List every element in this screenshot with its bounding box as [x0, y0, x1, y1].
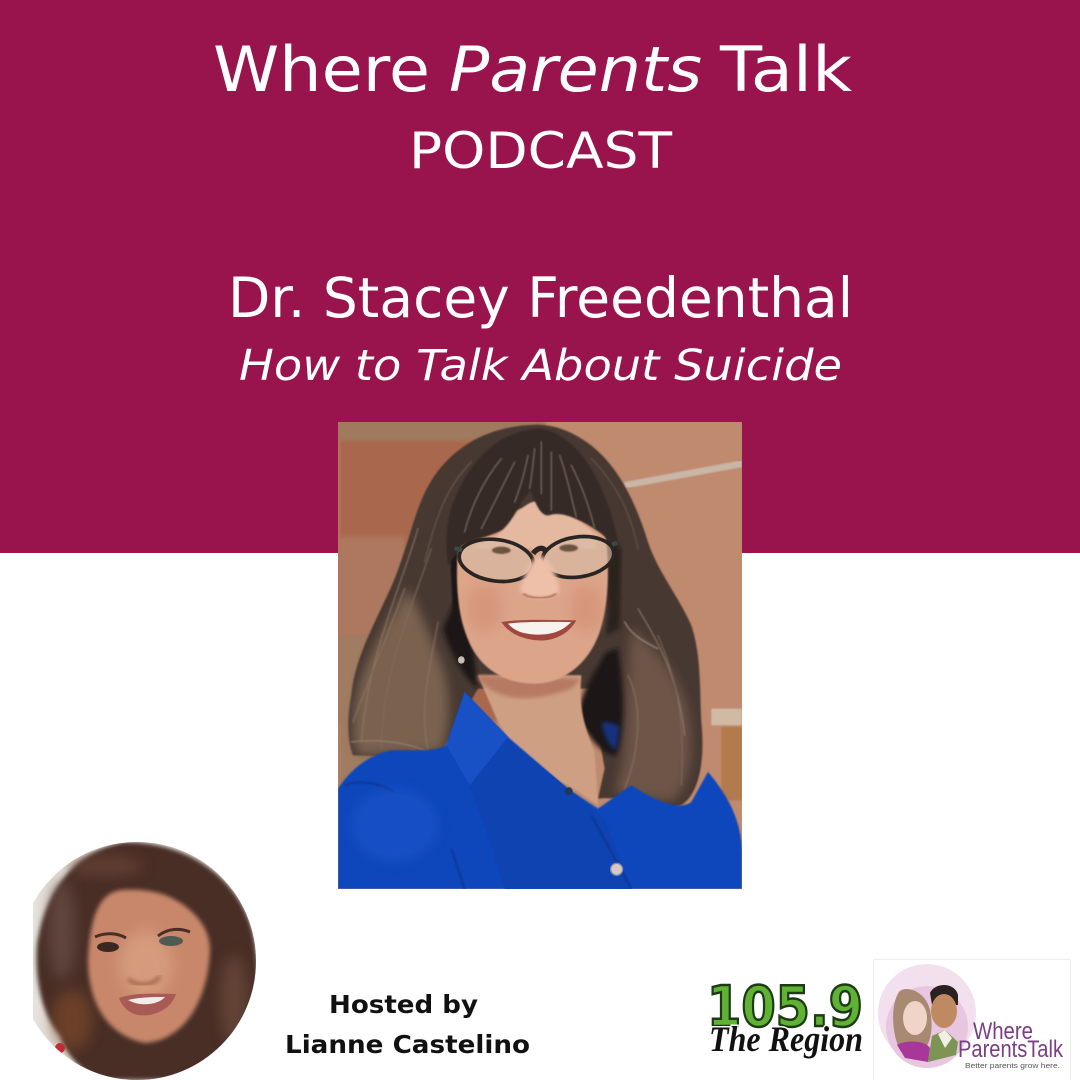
shirt button	[611, 863, 623, 875]
earring	[458, 656, 465, 664]
face	[457, 502, 608, 684]
logo wordmark	[958, 1018, 1064, 1063]
cheek shading	[468, 588, 501, 630]
host face	[88, 890, 210, 1043]
host portrait photo	[33, 842, 263, 1080]
logo tagline: Better parents grow here.	[965, 1061, 1060, 1070]
logo frame	[874, 960, 1070, 1080]
guest portrait photo	[338, 422, 742, 889]
host lips	[119, 994, 176, 1015]
glasses bridge	[533, 548, 546, 554]
glasses	[457, 534, 612, 584]
logo circles	[878, 964, 976, 1062]
title: Where Parents Talk	[213, 33, 852, 106]
subtitle: podcast: PODCAST	[409, 122, 673, 180]
eyes	[492, 544, 578, 554]
fringe highlights	[465, 442, 595, 532]
brick wall background	[338, 422, 742, 889]
teeth	[508, 622, 571, 635]
logo wordmark: ParentsTalk	[958, 1036, 1064, 1063]
host credit: Lianne Castelino	[285, 1030, 530, 1059]
host credit: Hosted by	[329, 990, 478, 1019]
logo woman	[893, 989, 932, 1062]
shirt shadow folds	[345, 783, 631, 889]
title: Where Parents Talk: Parents	[449, 33, 702, 106]
logo man	[928, 985, 958, 1062]
collar	[446, 692, 508, 785]
title: Where Parents Talk: Where	[213, 33, 430, 106]
necklace pendant	[565, 787, 573, 795]
hair highlights	[48, 856, 248, 1050]
host credit	[285, 990, 530, 1059]
long hair	[348, 425, 702, 807]
blue patch behind hair	[601, 722, 620, 750]
nose	[520, 555, 560, 598]
hair strands	[351, 459, 685, 789]
forehead	[494, 500, 596, 549]
neck and chest	[478, 675, 598, 805]
host hair	[37, 842, 258, 1080]
logo: 105.9 The Region: The Region	[709, 1019, 863, 1059]
host face highlight	[120, 931, 172, 999]
episode title: How to Talk About Suicide	[239, 341, 842, 391]
host teeth	[128, 997, 165, 1004]
guest name: Dr. Stacey Freedenthal	[228, 266, 853, 330]
host eyebrows	[95, 929, 190, 938]
host nose	[128, 976, 160, 984]
glasses temples	[455, 543, 617, 550]
logo: Where Parents Talk	[874, 960, 1070, 1080]
title: Where Parents Talk: Talk	[719, 33, 852, 106]
fringe bangs	[446, 429, 620, 565]
blue shirt	[338, 692, 742, 889]
host eyes	[97, 936, 183, 952]
shirt highlight	[356, 787, 433, 858]
shirt collar shadow	[468, 739, 631, 889]
photo backdrop	[33, 842, 263, 1080]
red garment	[55, 1043, 65, 1053]
logo wordmark: Where	[973, 1018, 1033, 1045]
logo: 105.9 The Region: 105.9	[707, 975, 863, 1040]
smile	[501, 620, 576, 641]
header band	[0, 0, 1080, 553]
neck shading	[478, 675, 581, 698]
